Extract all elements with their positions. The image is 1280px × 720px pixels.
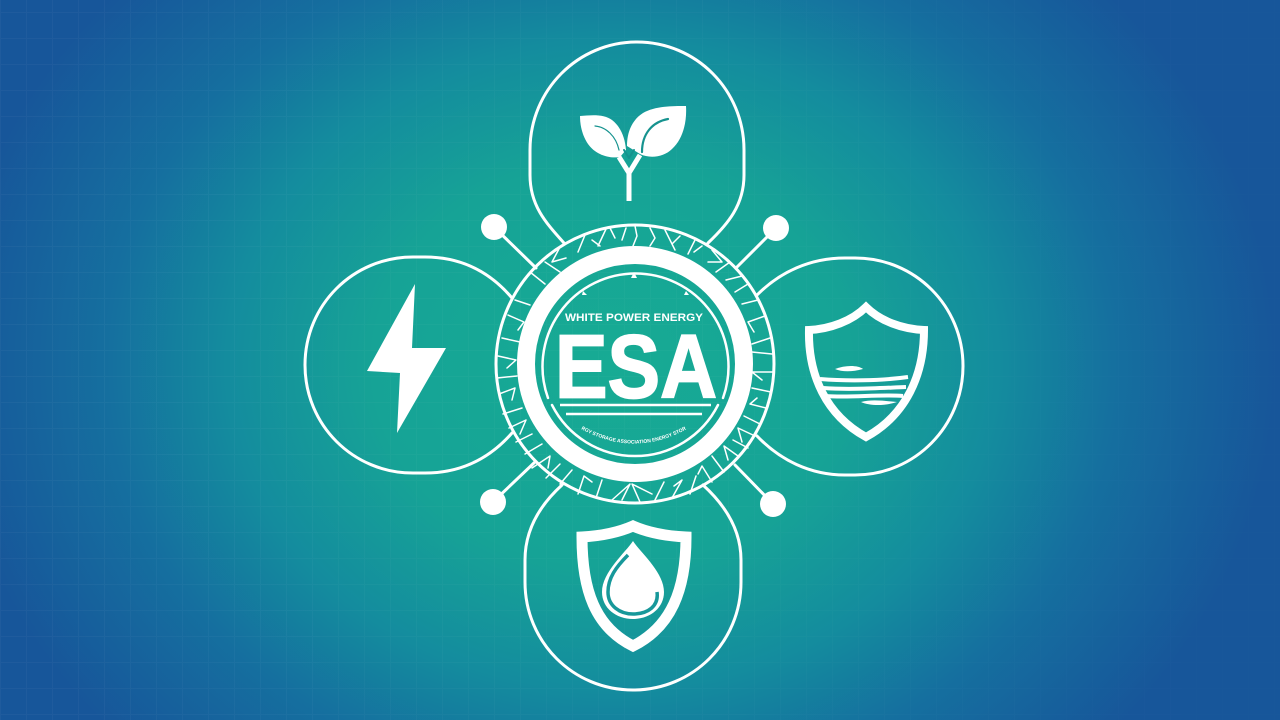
panel: left lobe outline xyxy=(305,257,512,473)
icon: plant sprout xyxy=(580,106,686,201)
thin inner ring arcs xyxy=(542,273,728,456)
icon: shield with waves xyxy=(809,307,924,437)
connector: top-left node xyxy=(481,214,536,268)
connector: top-right node xyxy=(737,215,789,267)
small badge marks xyxy=(582,272,689,295)
icon: shield with water drop xyxy=(582,526,686,646)
badge tagline: WHITE POWER ENERGY xyxy=(565,312,704,324)
central ESA badge xyxy=(494,224,776,504)
panel: top lobe outline xyxy=(530,42,744,243)
icon: lightning bolt xyxy=(367,284,446,433)
connector: bottom-left node xyxy=(480,462,535,515)
panel: right lobe outline xyxy=(757,258,963,475)
connector: bottom-right node xyxy=(735,465,786,517)
panel: bottom lobe outline xyxy=(525,485,741,690)
thick white ring xyxy=(526,255,744,473)
ESA title: ESA xyxy=(555,318,717,418)
badge underlines xyxy=(560,405,711,414)
badge lower caption: ENERGY STORAGE ASSOCIATION ENERGY STORAGE xyxy=(581,426,686,444)
outer cracked ring xyxy=(496,225,774,503)
